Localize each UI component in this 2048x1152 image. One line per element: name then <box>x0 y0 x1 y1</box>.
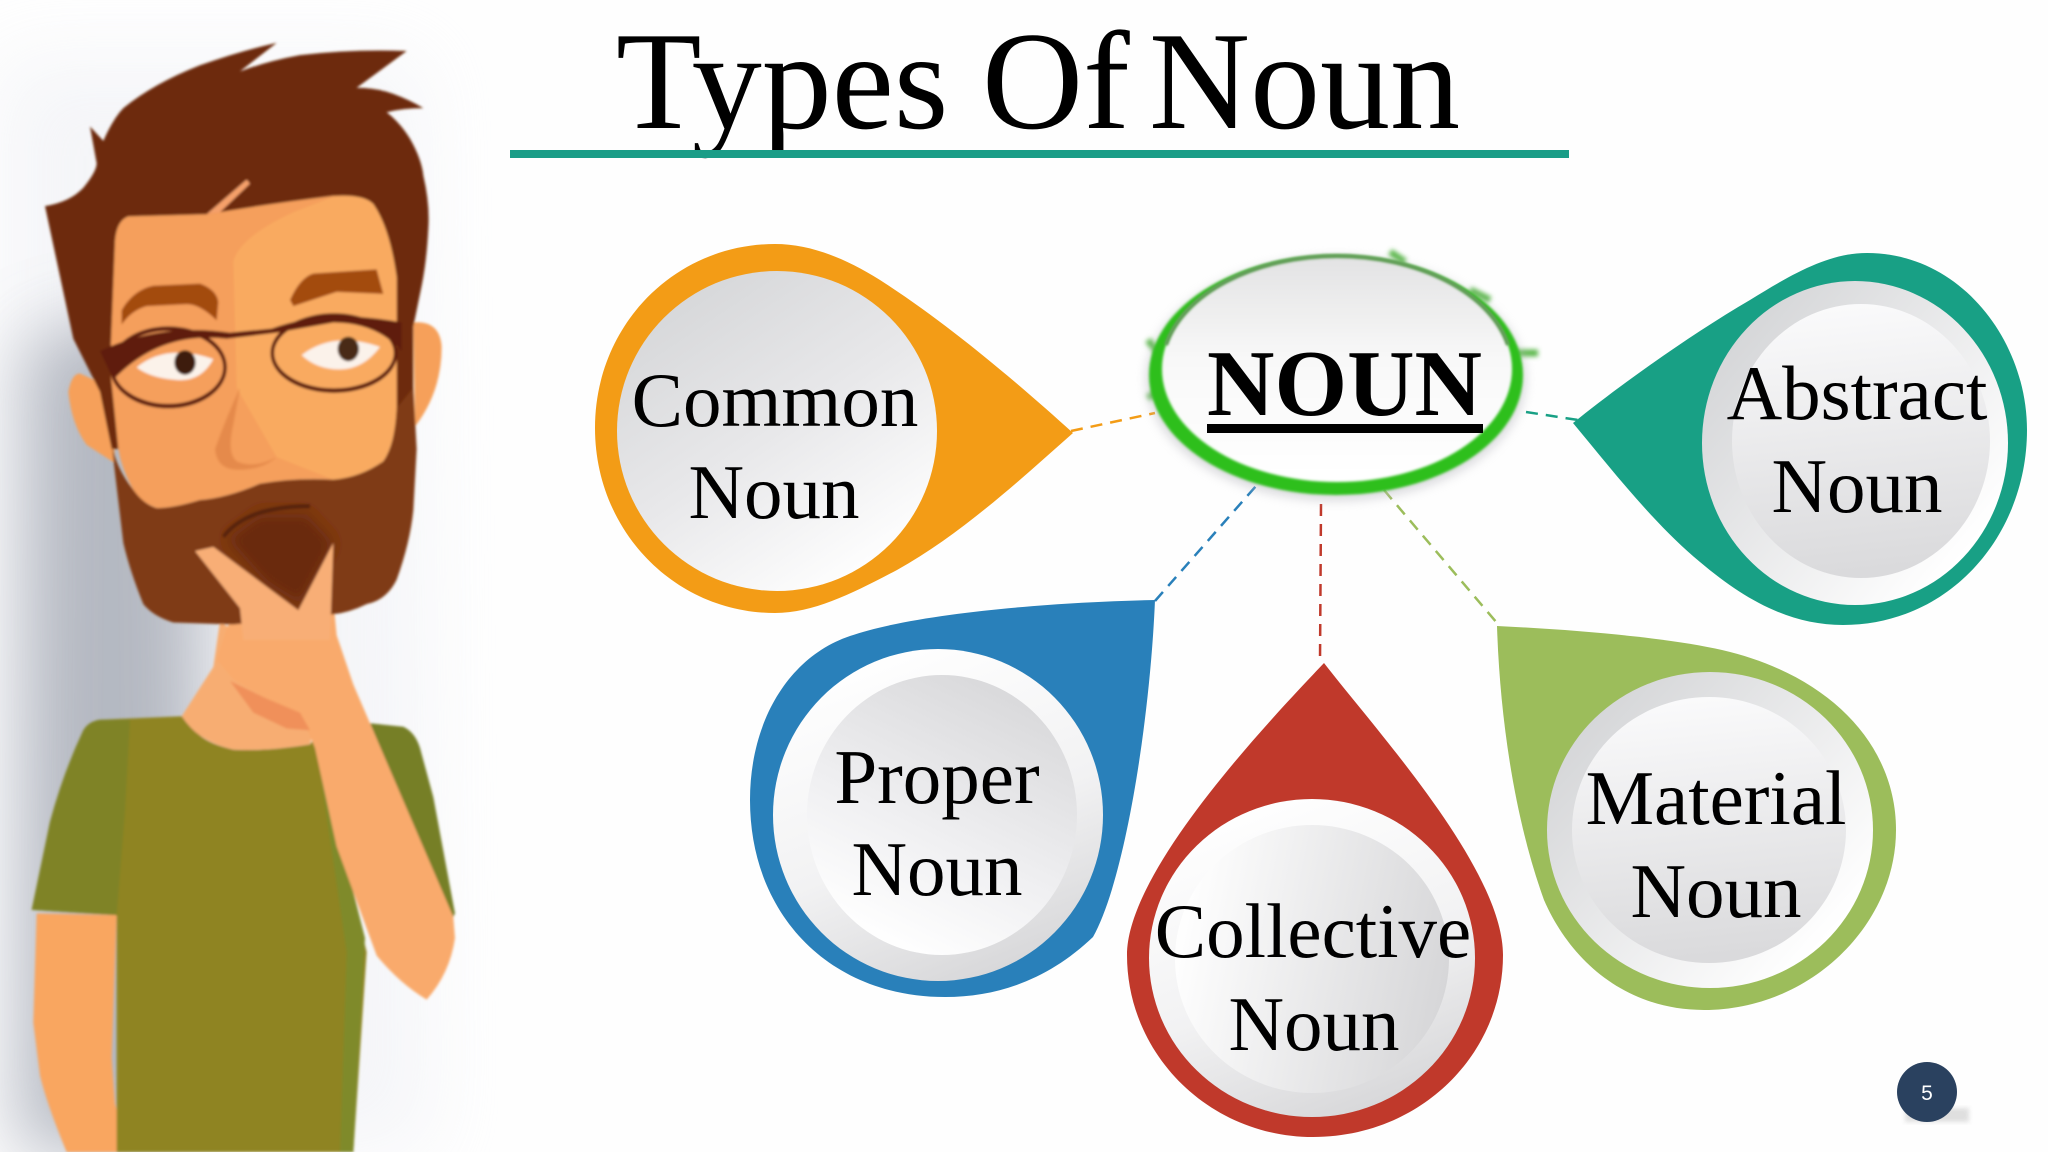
drop: Material Noun: Noun <box>1630 848 1802 934</box>
page number badge: 5 <box>1921 1082 1933 1105</box>
drop: Material Noun: Material <box>1586 755 1846 841</box>
character: thinking bearded man <box>32 43 455 1152</box>
drop: Common Noun <box>595 244 1073 613</box>
drop: Collective Noun: Collective <box>1155 888 1471 974</box>
drop: Collective Noun <box>1127 663 1503 1137</box>
title: Types <box>616 4 948 159</box>
central node: NOUN: NOUN <box>1207 332 1482 436</box>
drop: Abstract Noun: Noun <box>1771 443 1943 529</box>
background shadow behind character <box>0 60 430 1152</box>
drop: Material Noun <box>1497 626 1896 1010</box>
body: shirt and arms <box>32 600 455 1152</box>
central node: NOUN <box>1146 252 1538 501</box>
title: Of <box>982 4 1130 159</box>
connectors: dashed lines from centre to drops <box>1071 412 1578 662</box>
drop: Abstract Noun <box>1573 253 2027 625</box>
drop: Proper Noun <box>750 600 1155 997</box>
drop: Proper Noun: Noun <box>851 826 1023 912</box>
head: hair, face, glasses, beard <box>45 43 442 640</box>
page number badge <box>1897 1062 1969 1122</box>
title underline <box>510 150 1569 158</box>
drop: Common Noun: Common <box>632 357 918 443</box>
title: Noun <box>1149 4 1460 159</box>
drop: Collective Noun: Noun <box>1228 981 1400 1067</box>
drop: Abstract Noun: Abstract <box>1727 350 1987 436</box>
drop: Proper Noun: Proper <box>834 734 1040 820</box>
drop: Common Noun: Noun <box>688 449 860 535</box>
